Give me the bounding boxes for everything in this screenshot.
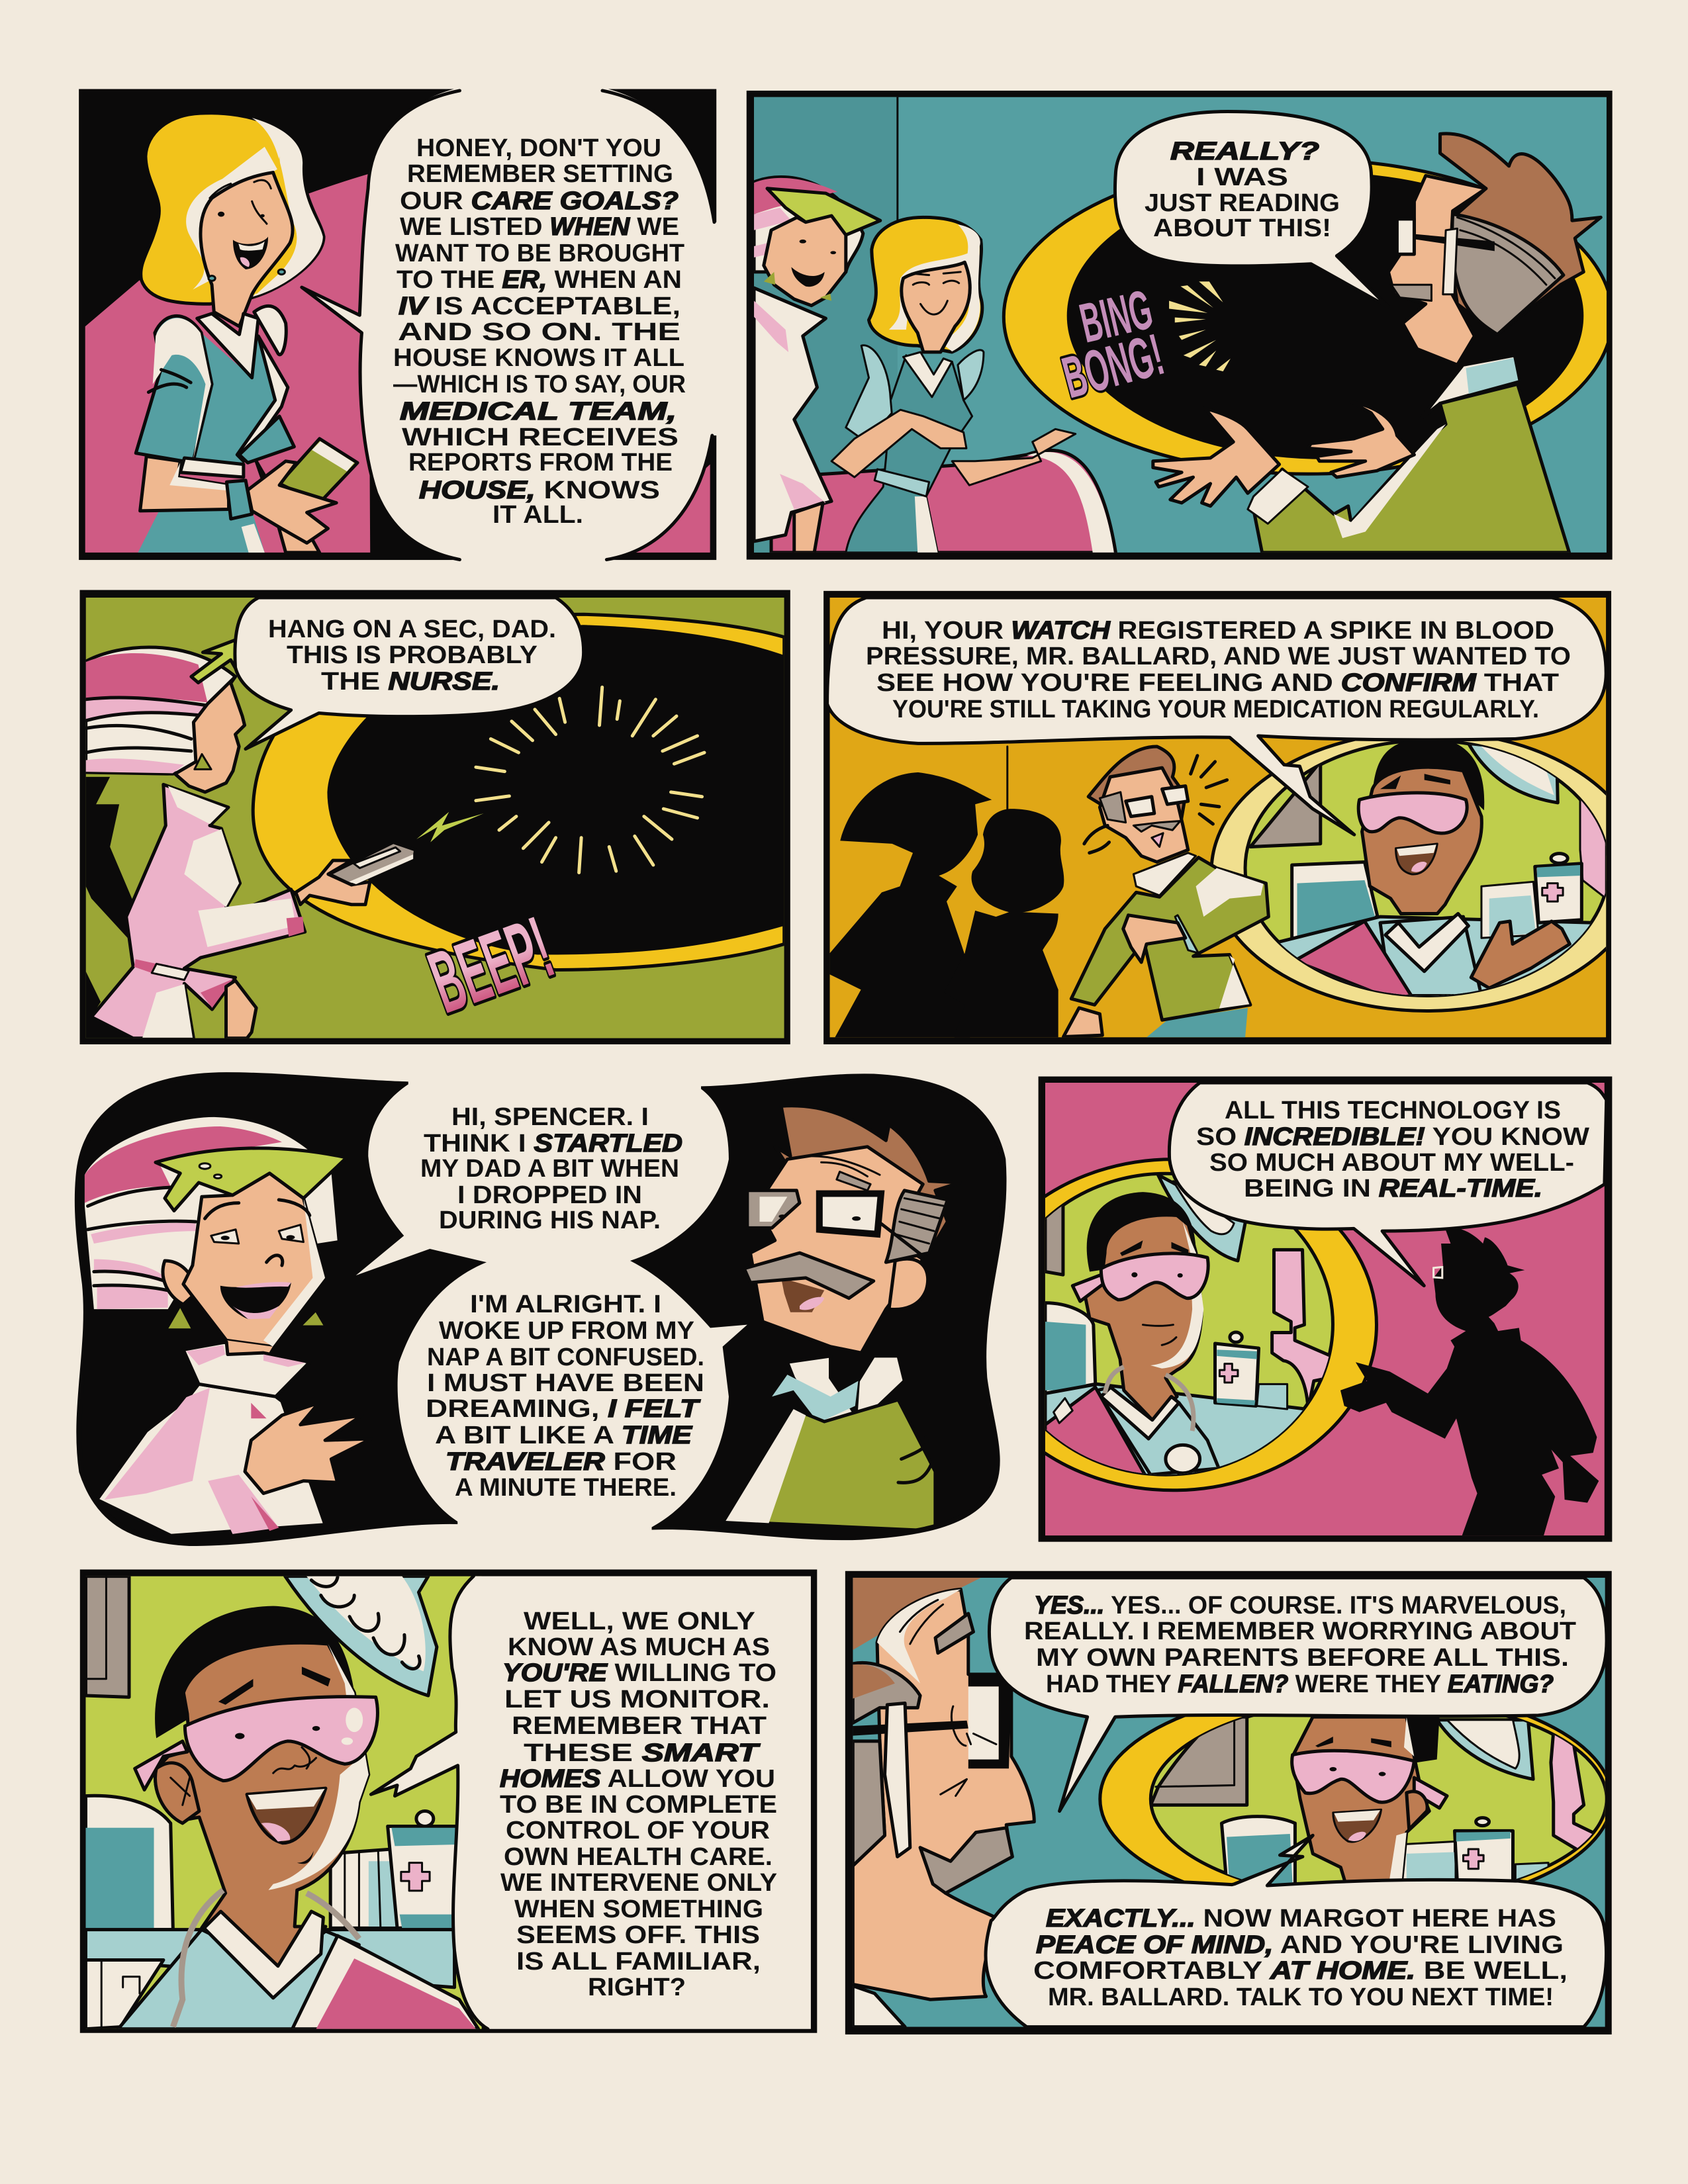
silhouettes of two women — [830, 772, 1064, 1037]
speech balloon shape — [302, 87, 720, 562]
panel 5 dialogue: father: A MINUTE THERE. — [455, 1474, 677, 1502]
daughter portrait — [85, 1117, 371, 1535]
panel 7 dialogue: LET US MONITOR. — [504, 1686, 770, 1713]
yellow portal ring — [1004, 159, 1613, 474]
panel 3: remote beep — [80, 590, 790, 1044]
daughter holding remote — [86, 635, 416, 1038]
panel 8 dialogue: father: MY OWN PARENTS BEFORE ALL THIS. — [1036, 1644, 1569, 1672]
chime rays — [1169, 281, 1231, 371]
panel 1 dialogue: IV IS ACCEPTABLE, — [399, 293, 680, 320]
panel 1 dialogue: HONEY, DON'T YOU — [416, 134, 661, 162]
top speech balloon shape — [989, 1578, 1607, 1811]
panel 7 dialogue: OWN HEALTH CARE. — [504, 1843, 773, 1871]
panel 7 dialogue: KNOW AS MUCH AS — [508, 1633, 770, 1661]
panel 6 dialogue: SO MUCH ABOUT MY WELL- — [1209, 1149, 1574, 1177]
panel 1 dialogue: HOUSE, KNOWS — [419, 477, 660, 504]
sound effect: bing bong — [1056, 279, 1170, 411]
father in green sweater — [1153, 134, 1601, 553]
panel 2 dialogue: ABOUT THIS! — [1153, 214, 1331, 242]
panel 7 dialogue: WELL, WE ONLY — [524, 1608, 755, 1635]
startled father — [1064, 747, 1268, 1037]
sunburst rays — [476, 687, 704, 873]
panel 8 dialogue: father — [1024, 1592, 1576, 1698]
panel 5 dialogue: father: NAP A BIT CONFUSED. — [427, 1343, 704, 1371]
panel 7 dialogue: WE INTERVENE ONLY — [500, 1869, 777, 1897]
joined speech balloons knocked out of the panel — [356, 1069, 747, 1549]
panel 6 dialogue: BEING IN REAL-TIME. — [1244, 1175, 1542, 1203]
panel 5 dialogue: father — [426, 1291, 704, 1502]
panel 4 artwork — [823, 591, 1642, 1044]
panel 7 dialogue: SEEMS OFF. THIS — [516, 1921, 760, 1949]
panel 3 artwork — [80, 590, 790, 1044]
speech balloon shape — [1169, 1083, 1607, 1286]
sound effect: bing bong: BONG! — [1056, 322, 1170, 411]
panel 5 dialogue: father: I MUST HAVE BEEN — [427, 1369, 704, 1397]
panel 7 dialogue: CONTROL OF YOUR — [506, 1817, 770, 1844]
clinic background — [85, 1576, 459, 2029]
panel 6 artwork — [970, 1077, 1612, 1542]
panel 5 dialogue: daughter: THINK I STARTLED — [424, 1130, 682, 1158]
panel 8 dialogue: nurse: EXACTLY... NOW MARGOT HERE HAS — [1046, 1905, 1556, 1933]
panel 1 dialogue: TO THE ER, WHEN AN — [397, 266, 682, 294]
panel 1: mother explains care goals — [79, 87, 720, 562]
panel 2: doorbell rings while the father talks — [747, 91, 1613, 560]
panel 1 dialogue: REPORTS FROM THE — [408, 449, 673, 477]
panel 2 dialogue — [1145, 138, 1340, 242]
panel 7: nurse close-up — [80, 1569, 817, 2033]
nurse scrubs, stethoscope and folder — [118, 1890, 479, 2029]
panel 6: silhouette of father speaking to nurse on screen — [970, 1077, 1612, 1542]
panel 5 dialogue: father: A BIT LIKE A TIME — [435, 1422, 693, 1449]
panel 5 dialogue: daughter: HI, SPENCER. I — [451, 1103, 649, 1131]
panel 1 dialogue: IT ALL. — [492, 501, 583, 529]
panel 8 dialogue: nurse: MR. BALLARD. TALK TO YOU NEXT TIME! — [1048, 1983, 1554, 2011]
panel 1 dialogue: REMEMBER SETTING — [407, 160, 673, 188]
panel 5: daughter and father talk to nurse — [77, 1069, 1004, 1549]
panel 1 dialogue — [393, 134, 686, 529]
panel 6 dialogue: ALL THIS TECHNOLOGY IS — [1225, 1097, 1561, 1124]
panel 7 dialogue: REMEMBER THAT — [512, 1712, 767, 1740]
panel 8 artwork — [845, 1571, 1612, 2034]
panel 3 dialogue: THE NURSE. — [321, 668, 500, 696]
panel 5 dialogue: father: I'M ALRIGHT. I — [470, 1291, 661, 1318]
panel 5 dialogue: daughter: DURING HIS NAP. — [439, 1206, 661, 1234]
panel 8 dialogue: father: YES... YES... OF COURSE. IT'S MARVELOUS, — [1034, 1592, 1566, 1619]
panel 8 dialogue: nurse: PEACE OF MIND, AND YOU'RE LIVING — [1036, 1931, 1564, 1959]
panel 7 dialogue: THESE SMART — [524, 1739, 761, 1767]
panel 7 dialogue — [500, 1608, 777, 2001]
pink chair — [771, 450, 1115, 553]
panel 1 dialogue: —WHICH IS TO SAY, OUR — [393, 371, 686, 398]
panel 7 artwork — [80, 1569, 817, 2033]
speech balloon shape — [371, 1576, 811, 2029]
panel 4 dialogue: YOU'RE STILL TAKING YOUR MEDICATION REGULARLY. — [892, 696, 1539, 723]
video call bubble with nurse — [1211, 731, 1642, 1011]
panel 4 dialogue: PRESSURE, MR. BALLARD, AND WE JUST WANTED TO — [866, 643, 1571, 670]
panel 3 dialogue: HANG ON A SEC, DAD. — [268, 615, 556, 643]
panel 1 dialogue: AND SO ON. THE — [398, 318, 680, 346]
panel 5 dialogue: father: WOKE UP FROM MY — [439, 1317, 694, 1345]
blonde mother smiling — [831, 217, 1076, 553]
panel 3 dialogue — [268, 615, 556, 696]
father close-up profile — [853, 1578, 1034, 2027]
panel 5 artwork — [77, 1069, 1004, 1549]
panel 2 dialogue: I WAS — [1196, 163, 1288, 191]
panel 5 dialogue: father: DREAMING, I FELT — [426, 1395, 700, 1423]
panel 1 dialogue: MEDICAL TEAM, — [400, 398, 677, 426]
woman with phone — [136, 113, 357, 553]
speech balloon shape — [827, 598, 1606, 835]
panel 7 dialogue: RIGHT? — [588, 1974, 686, 2001]
panel 2 dialogue: REALLY? — [1170, 138, 1319, 165]
panel 8 dialogue: nurse: COMFORTABLY AT HOME. BE WELL, — [1033, 1957, 1568, 1985]
silhouette of father — [1340, 1228, 1599, 1535]
sound effect: beep: BEEP! — [418, 897, 565, 1032]
signal bolt — [416, 812, 484, 842]
panel 1 dialogue: WE LISTED WHEN WE — [400, 213, 679, 241]
panel 1 dialogue: HOUSE KNOWS IT ALL — [393, 344, 684, 372]
panel 1 artwork — [79, 87, 720, 562]
panel 7 dialogue: HOMES ALLOW YOU — [500, 1765, 775, 1793]
panel 2 dialogue: JUST READING — [1145, 189, 1340, 217]
panel 8 dialogue: nurse — [1033, 1905, 1568, 2011]
panel 5 dialogue: father: TRAVELER FOR — [445, 1448, 677, 1476]
bottom speech balloon shape — [986, 1835, 1607, 2027]
father portrait — [726, 1106, 960, 1531]
panel 6 dialogue — [1196, 1097, 1589, 1203]
panel 5 dialogue: daughter: I DROPPED IN — [457, 1181, 642, 1209]
panel 7 dialogue: TO BE IN COMPLETE — [500, 1791, 777, 1819]
panel 3 dialogue: THIS IS PROBABLY — [287, 641, 538, 669]
panel 7 dialogue: YOU'RE WILLING TO — [502, 1659, 776, 1687]
video call ring with nurse — [1100, 1686, 1612, 1911]
nurse head and goggles — [135, 1606, 377, 1968]
panel 1 dialogue: WANT TO BE BROUGHT — [395, 240, 684, 267]
panel 2 artwork — [747, 91, 1613, 560]
sound effect: bing bong: BING — [1074, 279, 1158, 355]
panel 8: father and nurse conclude — [845, 1571, 1612, 2034]
panel 7 dialogue: WHEN SOMETHING — [514, 1895, 763, 1923]
panel 6 dialogue: SO INCREDIBLE! YOU KNOW — [1196, 1123, 1589, 1151]
panel 8 dialogue: father: REALLY. I REMEMBER WORRYING ABOUT — [1024, 1617, 1576, 1645]
panel 7 dialogue: IS ALL FAMILIAR, — [516, 1948, 761, 1976]
speech balloon shape — [1115, 111, 1388, 307]
speech balloon shape — [235, 598, 584, 749]
panel 4: nurse calls on video — [823, 591, 1642, 1044]
panel 4 dialogue: SEE HOW YOU'RE FEELING AND CONFIRM THAT — [876, 669, 1559, 697]
panel 8 dialogue: father: HAD THEY FALLEN? WERE THEY EATING? — [1046, 1670, 1554, 1698]
panel 4 dialogue: HI, YOUR WATCH REGISTERED A SPIKE IN BLOOD — [882, 617, 1554, 645]
panel 5 dialogue: daughter — [420, 1103, 682, 1234]
panel 4 dialogue — [866, 617, 1571, 723]
panel 5 dialogue: daughter: MY DAD A BIT WHEN — [420, 1155, 679, 1183]
yellow portal with black centre — [253, 614, 784, 970]
panel 1 dialogue: WHICH RECEIVES — [402, 424, 679, 451]
panel 1 dialogue: OUR CARE GOALS? — [400, 187, 679, 215]
video call ring — [970, 1160, 1376, 1490]
daughter in white coat — [754, 177, 880, 553]
